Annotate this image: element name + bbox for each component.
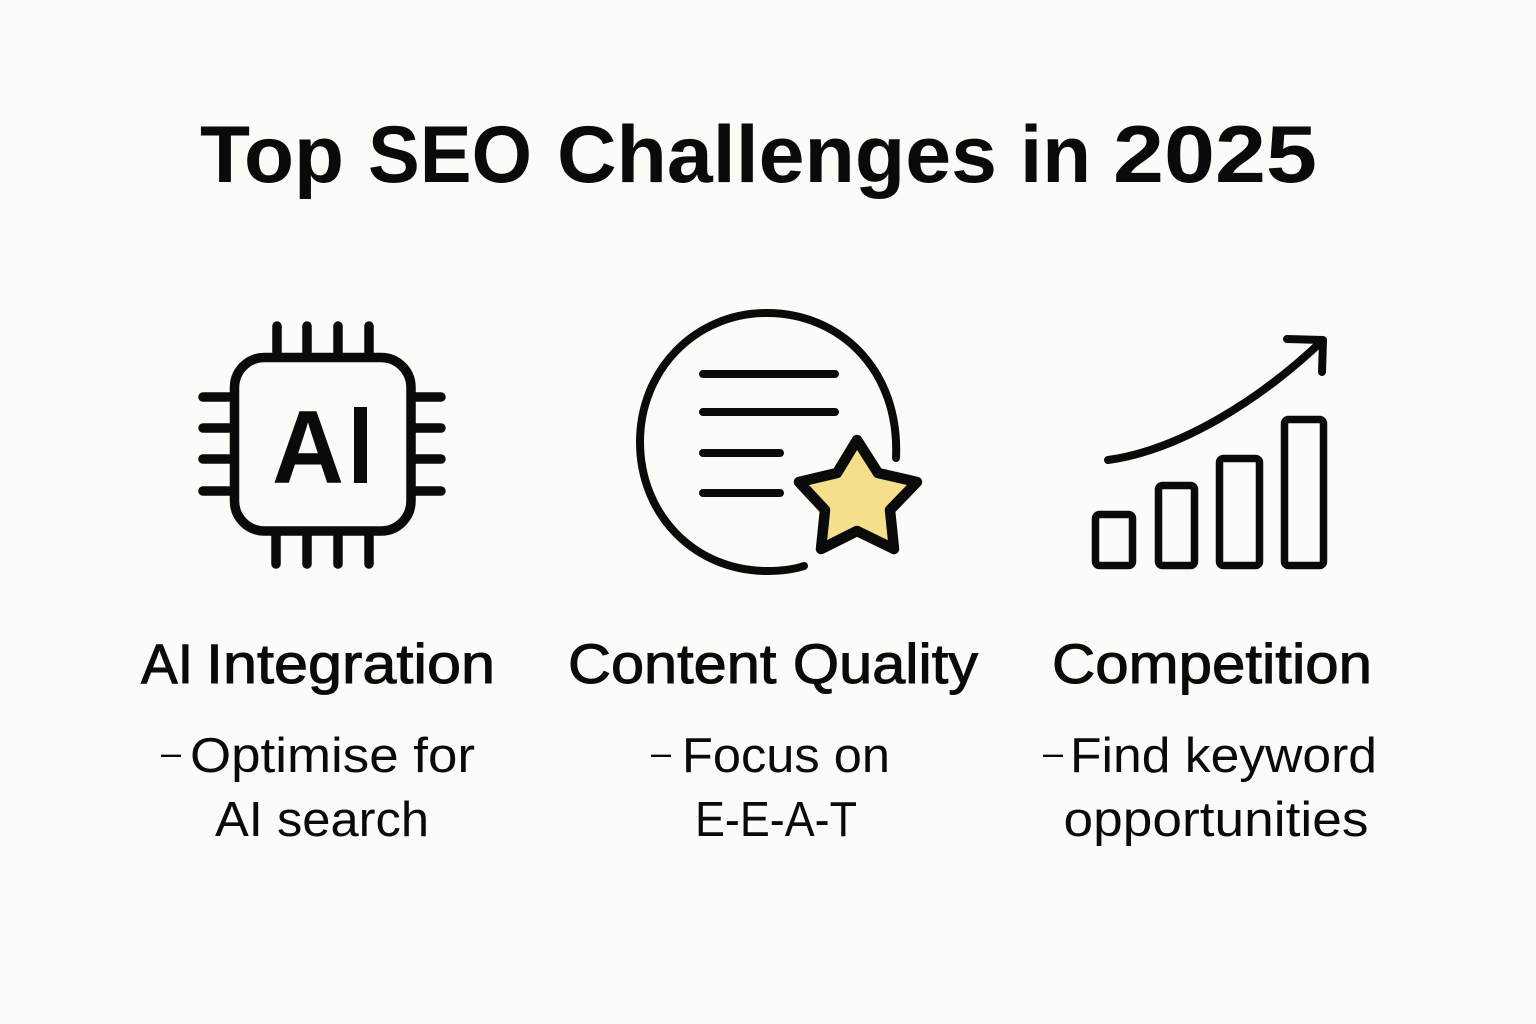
- text: AI integration description: Optimise for: [190, 729, 475, 783]
- heading: AI Integration: AI: [141, 632, 193, 695]
- text: content quality description: E-E-A-T: [695, 793, 857, 847]
- text: AI integration description: [161, 729, 475, 847]
- icon: document circle with star: [640, 313, 917, 571]
- title: 2025: [1113, 110, 1317, 200]
- text: content quality description: –: [651, 732, 671, 773]
- text: AI integration description: –: [161, 732, 181, 773]
- title: Top: [200, 110, 344, 200]
- title: Challenges: [557, 110, 997, 200]
- heading: Competition: Competition: [1052, 632, 1372, 695]
- text: AI integration description: AI search: [215, 793, 429, 847]
- heading: Content Quality: Content Quality: [568, 632, 978, 695]
- text: competition description: [1043, 729, 1377, 847]
- title: in: [1020, 110, 1091, 200]
- text: competition description: opportunities: [1064, 793, 1368, 847]
- panel: competition: [1043, 339, 1377, 847]
- title: SEO: [368, 110, 532, 200]
- title: [200, 110, 1317, 200]
- text: competition description: –: [1043, 732, 1063, 773]
- panel: AI integration: [141, 326, 495, 847]
- panel: content quality: [568, 313, 978, 847]
- text: content quality description: [651, 729, 890, 847]
- heading: AI Integration: Integration: [206, 632, 495, 695]
- icon: AI chip: [203, 326, 441, 564]
- icon: rising bar chart with arrow: [1096, 339, 1324, 566]
- text: content quality description: Focus on: [682, 729, 890, 783]
- text: competition description: Find keyword: [1070, 729, 1377, 783]
- icon: AI chip: A: [272, 390, 344, 506]
